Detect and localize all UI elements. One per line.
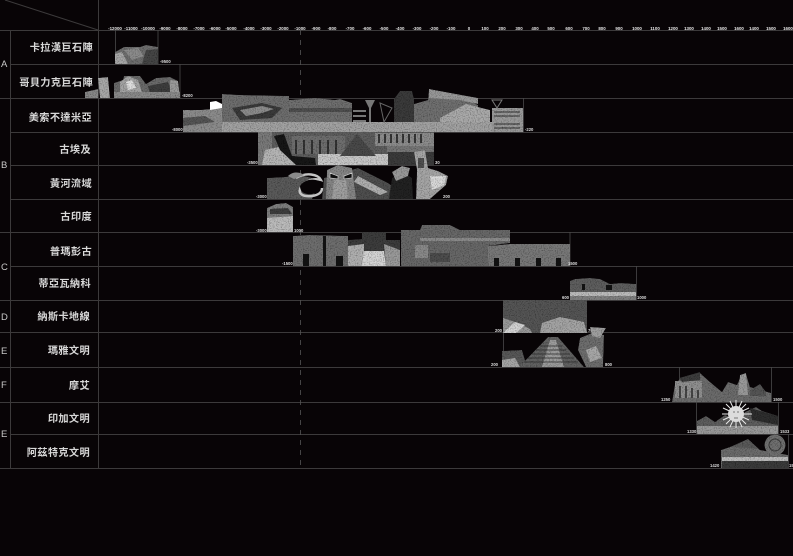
photo strip: Pumapunku	[282, 225, 578, 266]
photo strip: Karahan Tepe	[115, 30, 171, 64]
timeline axis: 1400	[701, 26, 711, 31]
timeline axis: -200	[430, 26, 439, 31]
row labels: 古印度	[60, 210, 92, 223]
photo strip: Karahan Tepe: -9500	[160, 59, 171, 64]
timeline axis: -400	[396, 26, 405, 31]
photo strip: Nazca Lines	[495, 300, 596, 333]
timeline axis: 0	[468, 26, 471, 31]
section letters: E	[1, 429, 7, 440]
row labels: 古埃及	[59, 143, 91, 156]
timeline axis: -300	[413, 26, 422, 31]
row labels: 摩艾	[69, 379, 90, 392]
row labels: 納斯卡地線	[37, 310, 90, 323]
timeline axis: 1300	[684, 26, 694, 31]
icon: sun face	[722, 400, 752, 428]
photo strip: Pumapunku: 1500	[568, 261, 578, 266]
photo strip: Maya: 800	[605, 362, 613, 367]
photo strip: Aztec: 1420	[710, 463, 720, 468]
photo strip: Moai: 1250	[661, 397, 671, 402]
timeline axis	[108, 26, 793, 31]
timeline axis: 1100	[650, 26, 660, 31]
photo strip: Ancient India: 1000	[294, 228, 304, 233]
row labels: 普瑪彭古	[50, 245, 92, 258]
photo strip: Tiwanaku: 600	[562, 295, 570, 300]
timeline axis: 900	[615, 26, 623, 31]
timeline axis: -500	[380, 26, 389, 31]
section letters: B	[1, 160, 7, 171]
photo strip: Ancient India	[256, 203, 304, 233]
row labels: 蒂亞瓦納科	[38, 277, 91, 290]
timeline axis: -700	[346, 26, 355, 31]
timeline axis: 700	[582, 26, 590, 31]
timeline axis: -11000	[124, 26, 138, 31]
photo strip: Mesopotamia	[172, 89, 534, 132]
timeline axis: -12000	[108, 26, 122, 31]
photo strip: Tiwanaku: 1000	[637, 295, 647, 300]
photo strip: Mesopotamia: -8000	[172, 127, 183, 132]
timeline axis: -10000	[141, 26, 155, 31]
photo strip: Gobekli Tepe: -8200	[182, 93, 193, 98]
timeline axis: -800	[328, 26, 337, 31]
photo strip: Ancient Egypt: 30	[435, 160, 440, 165]
row labels: 美索不達米亞	[29, 111, 92, 124]
section letters: F	[1, 380, 7, 391]
timeline axis: 1400	[749, 26, 759, 31]
row labels	[19, 41, 93, 459]
timeline axis: -600	[363, 26, 372, 31]
photo strip: Ancient Egypt	[247, 132, 440, 165]
timeline axis: -5000	[225, 26, 237, 31]
photo strip: Nazca Lines: 700	[588, 328, 596, 333]
timeline axis: 500	[547, 26, 555, 31]
timeline axis: 1600	[734, 26, 744, 31]
photo strip: Moai	[661, 367, 783, 402]
photo strip: Maya	[491, 327, 613, 367]
photo strip: Inca	[687, 400, 790, 434]
photo strip: Yellow River: -3000	[256, 194, 267, 199]
timeline axis: 100	[481, 26, 489, 31]
photo strip: Yellow River: 200	[443, 194, 451, 199]
timeline axis: -7000	[193, 26, 205, 31]
section letters: C	[1, 262, 8, 273]
photo strip: Nazca Lines: 200	[495, 328, 503, 333]
timeline axis: 1500	[766, 26, 776, 31]
photo strip: Pumapunku: -1500	[282, 261, 293, 266]
timeline axis: -900	[312, 26, 321, 31]
timeline axis: 1200	[668, 26, 678, 31]
photo strip: Gobekli Tepe	[85, 64, 193, 98]
photo strip: Inca: 1330	[687, 429, 697, 434]
section letters	[1, 59, 8, 440]
row labels: 阿茲特克文明	[27, 446, 90, 459]
photo strip: Yellow River	[256, 150, 451, 199]
timeline axis: -8000	[176, 26, 188, 31]
photo strip: Maya: 200	[491, 362, 499, 367]
timeline axis: -100	[447, 26, 456, 31]
photo strip: Ancient Egypt: -3500	[247, 160, 258, 165]
row labels: 黃河流域	[50, 177, 92, 190]
timeline axis: 1500	[717, 26, 727, 31]
row labels: 瑪雅文明	[48, 344, 90, 357]
photo strip: Ancient India: -3000	[256, 228, 267, 233]
section letters: E	[1, 346, 7, 357]
timeline axis: -2000	[277, 26, 289, 31]
timeline axis: -4000	[243, 26, 255, 31]
timeline axis: 400	[531, 26, 539, 31]
timeline axis: 600	[565, 26, 573, 31]
timeline axis: -9000	[159, 26, 171, 31]
timeline axis: 300	[515, 26, 523, 31]
row labels: 卡拉漢巨石陣	[30, 41, 93, 54]
timeline axis: -1000	[294, 26, 306, 31]
photo strip: Aztec	[710, 434, 793, 468]
timeline axis: 800	[598, 26, 606, 31]
section letters: A	[1, 59, 8, 70]
timeline axis: 1000	[632, 26, 642, 31]
row labels: 印加文明	[48, 412, 90, 425]
photo strip: Inca: 1533	[780, 429, 790, 434]
section letters: D	[1, 312, 8, 323]
photo strip: Mesopotamia: -220	[525, 127, 534, 132]
timeline axis: -3000	[260, 26, 272, 31]
timeline axis: 200	[498, 26, 506, 31]
photo strip: Tiwanaku	[562, 266, 647, 300]
timeline axis: -6000	[209, 26, 221, 31]
row labels: 哥貝力克巨石陣	[19, 76, 93, 89]
timeline axis: 1600	[783, 26, 793, 31]
photo strip: Moai: 1500	[773, 397, 783, 402]
